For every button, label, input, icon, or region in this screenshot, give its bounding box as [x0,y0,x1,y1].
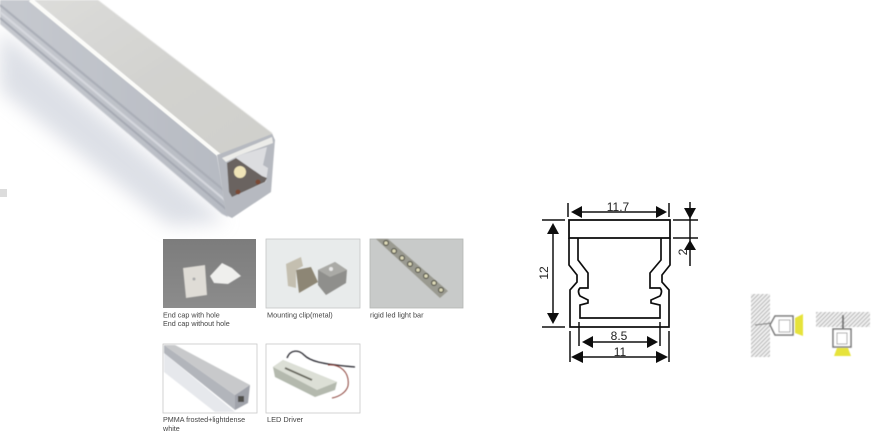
icon: LED strip [376,239,448,298]
profile side face [0,0,228,217]
panel: rigid LED bar thumbnail [370,239,463,320]
side groove lines [0,5,226,209]
panel: main product photo of aluminium LED profile [0,0,275,226]
dimension: 8.5: 8.5 [611,329,628,343]
caption: PMMA frosted+lightdense [163,415,245,424]
caption: LED Driver [267,415,304,424]
dimension: 12 [537,220,565,327]
dimension: 11.7 [568,200,669,218]
caption [163,310,230,328]
dimension: 12: 12 [537,266,551,280]
icon: profile [164,345,250,412]
dimension: 2: 2 [676,248,690,255]
dimension: 11: 11 [614,345,627,359]
chart: cross-section dimension drawing [537,200,698,363]
highlight edge [30,0,220,156]
panel: LED driver thumbnail [266,344,360,424]
product shadow [0,30,226,226]
panel: PMMA diffuser thumbnail [162,344,257,433]
caption: white [162,424,180,433]
caption [162,415,245,433]
dimension: 11.7: 11.7 [607,200,630,214]
dimension: 11 [570,331,669,363]
caption: rigid led light bar [370,310,424,320]
profile top diffuser face [34,0,274,156]
icon: metal clips [286,257,347,295]
small grey mark [0,189,7,197]
caption: Mounting clip(metal) [267,310,333,320]
diagram: ceiling mounting [816,312,870,356]
profile cross-section [569,220,670,327]
profile end with LED [217,134,275,218]
dimension: 2 [673,202,698,266]
diagram: wall mounting [751,294,803,357]
caption: End cap with hole [163,310,220,320]
icon: driver with cables [273,351,355,398]
panel: mounting clip thumbnail [266,239,360,320]
panel: end cap thumbnail [163,239,256,328]
dimension: 8.5 [579,322,660,348]
caption: End cap without hole [163,319,230,328]
icon: end caps [183,263,241,298]
